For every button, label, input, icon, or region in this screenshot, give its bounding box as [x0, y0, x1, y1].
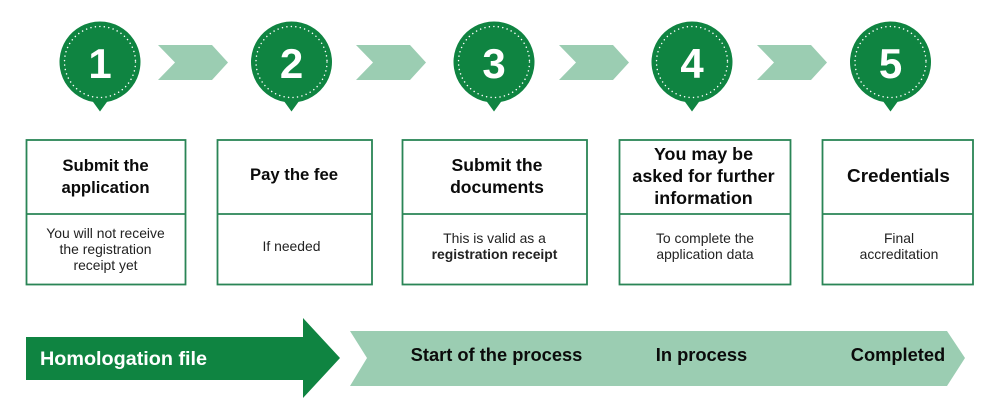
panel: pay the fee: If needed	[263, 238, 320, 254]
panel: further information: asked for further	[632, 166, 775, 186]
arrow: process stages	[350, 331, 965, 386]
arrow: step 3 to 4	[559, 45, 629, 80]
panel: submit the application: Submit the	[62, 156, 149, 175]
panel: further information	[620, 140, 790, 284]
step 3 marker: 3	[482, 40, 506, 87]
arrow: process stages: In process	[656, 344, 747, 365]
arrow: step 2 to 3	[356, 45, 426, 80]
arrow: step 1 to 2	[158, 45, 228, 80]
panel: credentials: Final	[884, 230, 914, 246]
panel: submit the documents: This is valid as a	[443, 230, 546, 246]
step 1 marker	[60, 22, 141, 112]
arrow: process stages: Completed	[851, 344, 945, 365]
step 5 marker	[850, 22, 931, 112]
panel: further information: To complete the	[656, 230, 754, 246]
panel: submit the application: receipt yet	[73, 257, 138, 273]
panel: submit the application: You will not receive	[46, 225, 165, 241]
panel: further information: You may be	[654, 144, 753, 164]
panel: credentials: accreditation	[860, 246, 938, 262]
panel: submit the documents: Submit the	[452, 155, 543, 175]
panel: further information: application data	[656, 246, 754, 262]
step 2 marker: 2	[280, 40, 303, 87]
panel: further information: information	[654, 188, 753, 208]
step 3 marker	[453, 22, 534, 112]
panel: submit the documents: documents	[450, 177, 544, 197]
panel: submit the application	[26, 140, 186, 284]
step 4 marker	[651, 22, 733, 112]
arrow: step 4 to 5	[757, 45, 827, 80]
step 4 marker: 4	[680, 40, 704, 87]
panel: submit the documents: registration receipt	[432, 246, 558, 262]
step 5 marker: 5	[879, 40, 902, 87]
panel: submit the documents	[402, 140, 587, 284]
panel: submit the application: application	[61, 178, 150, 197]
step 2 marker	[251, 22, 332, 112]
panel: pay the fee	[218, 140, 372, 284]
panel: pay the fee: Pay the fee	[250, 165, 338, 184]
arrow: homologation file: Homologation file	[40, 348, 207, 370]
panel: submit the application: the registration	[60, 241, 151, 257]
panel: credentials	[822, 140, 973, 284]
arrow: homologation file	[26, 318, 340, 398]
arrow: process stages: Start of the process	[411, 344, 582, 365]
step 1 marker: 1	[88, 40, 112, 87]
panel: credentials: Credentials	[847, 166, 950, 187]
